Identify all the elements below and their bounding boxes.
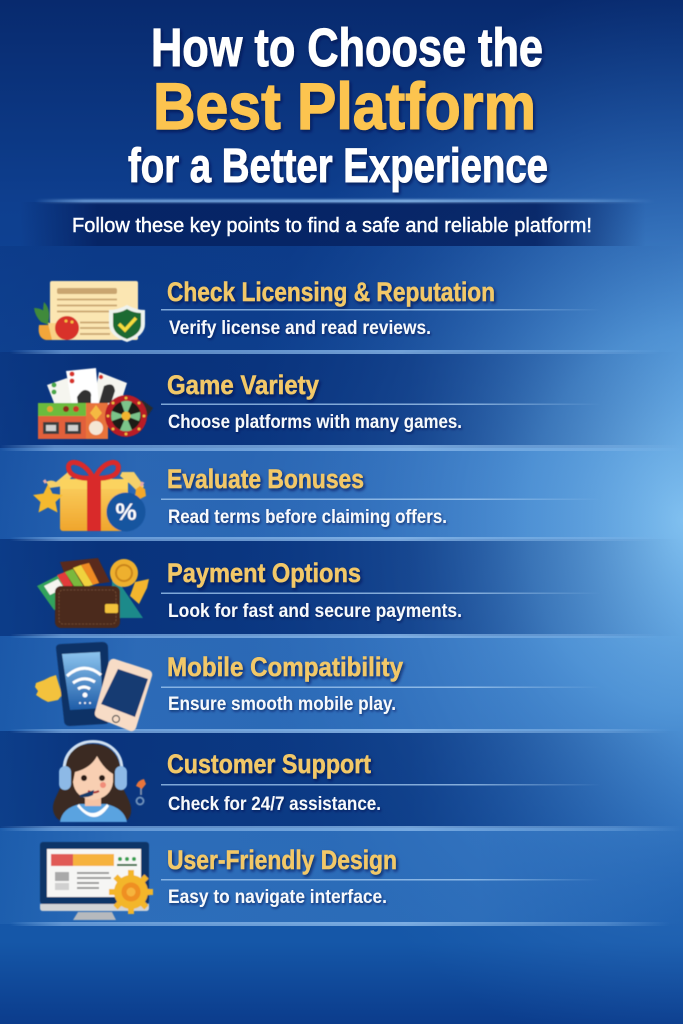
panel: mobile compatibility (35, 642, 601, 731)
icon: phones with wifi (35, 642, 152, 731)
description: Ensure smooth mobile play. (168, 694, 396, 715)
heading: Customer Support (167, 749, 371, 779)
panel: user-friendly design (40, 842, 601, 920)
description: Read terms before claiming offers. (168, 507, 447, 528)
description: Choose platforms with many games. (168, 412, 462, 433)
icon: certificate and shield (34, 281, 145, 342)
icon: gift box with percent badge (33, 462, 146, 532)
title: Best Platform (153, 69, 536, 143)
heading: Game Variety (167, 370, 319, 400)
icon: monitor with gear (40, 842, 153, 920)
description: Look for fast and secure payments. (168, 601, 462, 622)
panel: payment options (37, 558, 601, 628)
panel: check licensing (34, 277, 601, 342)
icon: gift box with percent badge: % (115, 499, 137, 526)
subtitle banner (20, 200, 665, 246)
panel: game variety (38, 368, 601, 439)
heading: Mobile Compatibility (167, 652, 403, 682)
row shading (0, 246, 683, 924)
title: for a Better Experience (128, 140, 548, 193)
heading: Payment Options (167, 558, 361, 588)
heading: Check Licensing & Reputation (167, 277, 495, 307)
description: Verify license and read reviews. (169, 318, 431, 339)
title (128, 18, 548, 193)
panel: evaluate bonuses (33, 462, 601, 532)
icon: cards, slot machine and roulette (38, 368, 153, 439)
panel: customer support (53, 742, 601, 822)
heading: Evaluate Bonuses (167, 464, 364, 494)
icon: wallet with cards and coin (37, 558, 149, 628)
icon: support agent with headset (53, 742, 146, 822)
description: Check for 24/7 assistance. (168, 794, 381, 815)
description: Easy to navigate interface. (168, 887, 387, 908)
title: How to Choose the (151, 18, 543, 78)
row separators (0, 350, 683, 926)
subtitle banner: Follow these key points to find a safe and reliable platform! (72, 215, 592, 237)
heading: User-Friendly Design (167, 845, 397, 875)
